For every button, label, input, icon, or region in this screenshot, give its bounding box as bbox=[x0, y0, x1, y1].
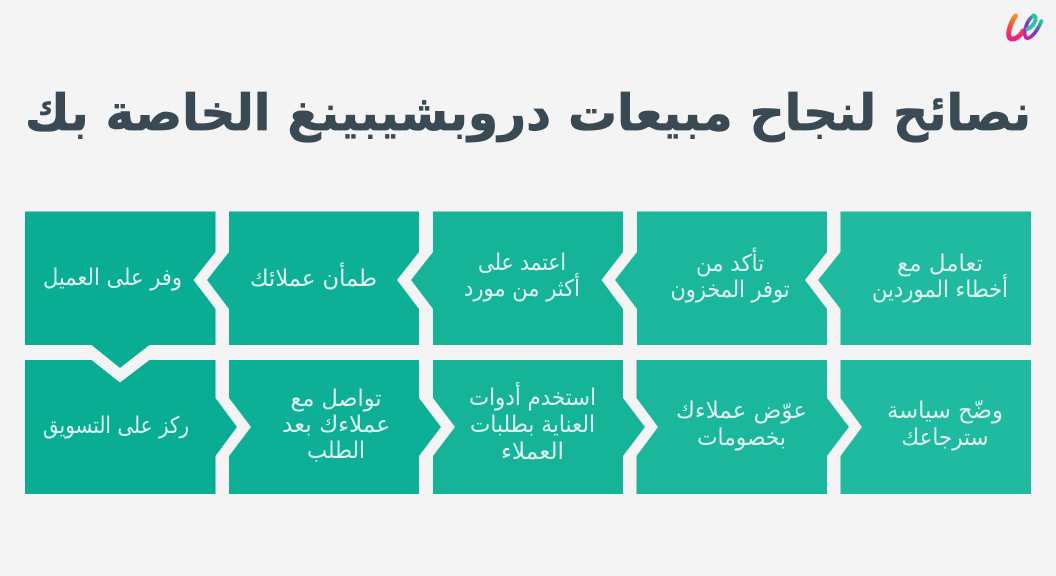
panel: step 10 bbox=[840, 360, 1031, 494]
step 2 shape bbox=[615, 212, 827, 345]
step 3 text bbox=[464, 250, 580, 302]
panel: step 2 bbox=[615, 212, 827, 345]
step 8 text: العناية بطلبات bbox=[470, 412, 595, 438]
step 10 text bbox=[887, 398, 1003, 451]
step 5 text: وفر على العميل bbox=[43, 265, 182, 291]
step 10 text: سترجاعك bbox=[902, 425, 988, 451]
panel: step 3 bbox=[411, 212, 623, 345]
step 7 text: الطلب bbox=[307, 438, 365, 464]
step 7 text: عملاءك بعد bbox=[282, 412, 390, 438]
step 4 text: طمأن عملائك bbox=[250, 262, 377, 292]
step 2 text bbox=[670, 247, 790, 303]
step 10 shape bbox=[840, 360, 1031, 494]
step 6 shape bbox=[25, 360, 237, 494]
logo icon bbox=[1009, 16, 1042, 39]
panel: step 8 bbox=[433, 360, 645, 494]
step 1 text: تعامل مع bbox=[897, 251, 983, 277]
step 3 text: اعتمد على bbox=[478, 250, 566, 276]
step 1 text: أخطاء الموردين bbox=[872, 274, 1008, 303]
step 3 shape bbox=[411, 212, 623, 345]
step 7 shape bbox=[229, 360, 441, 494]
step 6 text: ركز على التسويق bbox=[43, 413, 189, 439]
step 1 text bbox=[872, 251, 1008, 303]
panel: step 4 bbox=[207, 212, 419, 345]
step 7 text: تواصل مع bbox=[290, 386, 382, 412]
panel: step 1 bbox=[818, 212, 1031, 345]
step 2 text: توفر المخزون bbox=[670, 277, 790, 303]
step 8 shape bbox=[433, 360, 645, 494]
step 9 text: بخصومات bbox=[697, 425, 786, 451]
step 8 text bbox=[469, 382, 596, 465]
step 10 text: وضّح سياسة bbox=[887, 398, 1003, 424]
step 5 shape bbox=[25, 212, 216, 368]
step 4 shape bbox=[207, 212, 419, 345]
panel: step 9 bbox=[636, 360, 849, 494]
step 9 shape bbox=[636, 360, 849, 494]
step 3 text: أكثر من مورد bbox=[464, 273, 580, 302]
panel: step 5 bbox=[25, 212, 216, 368]
step 8 text: العملاء bbox=[501, 439, 564, 465]
step 9 text bbox=[676, 398, 807, 451]
step 7 text bbox=[282, 386, 390, 464]
step 8 text: استخدم أدوات bbox=[469, 382, 596, 411]
step 1 shape bbox=[818, 212, 1031, 345]
step 9 text: عوّض عملاءك bbox=[676, 398, 807, 424]
panel: step 7 bbox=[229, 360, 441, 494]
panel: step 6 bbox=[25, 360, 237, 494]
title: نصائح لنجاح مبيعات دروبشيبينغ الخاصة بك bbox=[25, 84, 1031, 143]
step 2 text: تأكد من bbox=[696, 247, 764, 277]
